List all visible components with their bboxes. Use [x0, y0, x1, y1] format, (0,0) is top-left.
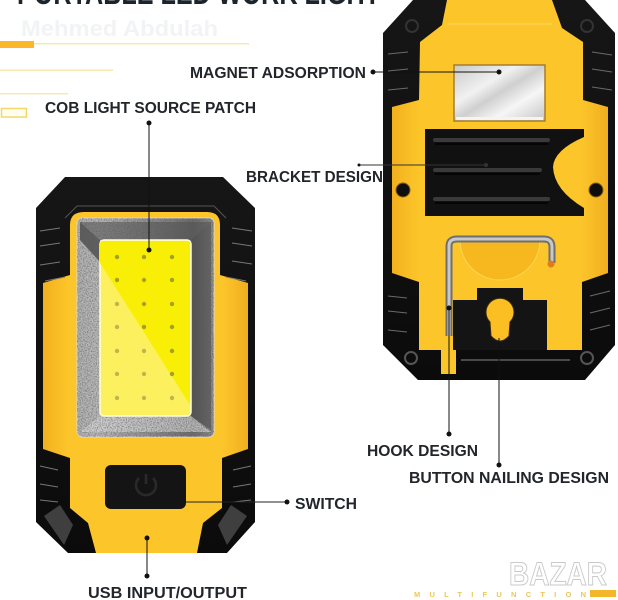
LED dots	[115, 255, 174, 400]
bracket	[425, 129, 584, 216]
magnet plate	[454, 65, 545, 121]
device: front view	[36, 177, 255, 553]
bumper facets, bottom	[40, 466, 251, 545]
callout: button nailing design	[409, 338, 609, 487]
front black housing	[36, 177, 255, 553]
nailing plate	[453, 288, 547, 350]
hook	[449, 239, 552, 336]
callout: magnet adsorption	[190, 65, 502, 82]
bumper ribs, top	[40, 206, 252, 281]
watermark: bazar: BAZAR	[509, 556, 607, 592]
back black housing	[383, 0, 615, 380]
hook tip	[548, 260, 554, 268]
bumper details	[388, 20, 612, 364]
callout: hook design: HOOK DESIGN	[367, 443, 478, 460]
keyhole	[486, 298, 514, 341]
front yellow body	[43, 212, 248, 553]
metal reflector	[77, 218, 214, 437]
screw holes	[396, 183, 603, 197]
back yellow body	[392, 0, 608, 374]
callout: cob light source patch: COB LIGHT SOURCE PATCH	[45, 100, 256, 117]
top highlight line	[447, 23, 552, 25]
callout: hook design	[367, 306, 478, 460]
callout: cob light source patch	[45, 100, 256, 252]
device: back view	[383, 0, 615, 380]
footer: multifunction label: MULTIFUNCTION	[414, 590, 586, 599]
hook recess	[460, 240, 540, 280]
COB light panel	[100, 240, 191, 416]
callout: switch: SWITCH	[295, 496, 357, 513]
icon: power symbol	[136, 474, 156, 495]
watermark: author name: Mehmed Abdulah	[21, 16, 218, 41]
callout: button nailing design: BUTTON NAILING DESIGN	[409, 470, 609, 487]
callout: bracket design: BRACKET DESIGN	[246, 169, 383, 186]
callout: switch	[186, 496, 357, 513]
callout: usb input/output	[88, 536, 247, 600]
callout: magnet adsorption: MAGNET ADSORPTION	[190, 65, 366, 82]
switch button	[105, 465, 186, 509]
decorative accent bars	[0, 41, 249, 117]
callout: bracket design	[246, 163, 488, 186]
